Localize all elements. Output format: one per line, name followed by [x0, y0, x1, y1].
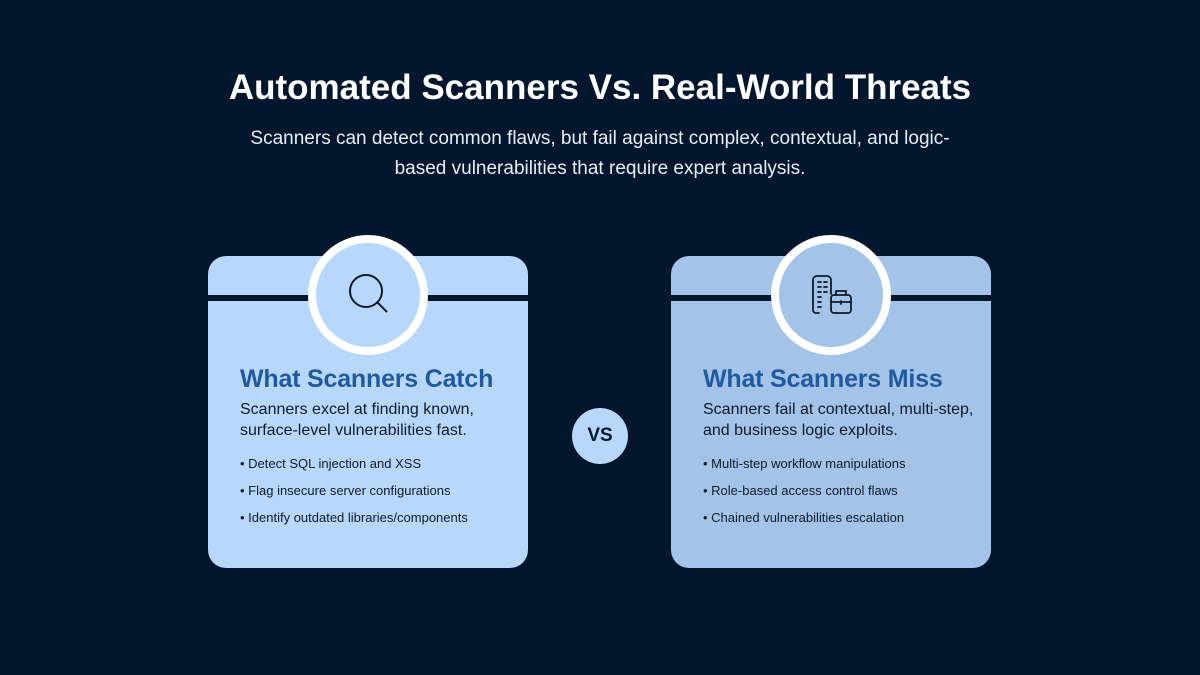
bullet list [703, 456, 906, 525]
vs badge: VS [587, 425, 613, 446]
bullet list: • Chained vulnerabilities escalation [703, 510, 904, 525]
bullet list: • Identify outdated libraries/components [240, 510, 468, 525]
bullet list: • Detect SQL injection and XSS [240, 456, 421, 471]
description: Scanners excel at finding known, surface-level vulnerabilities fast. [240, 401, 474, 439]
panel: catch [208, 256, 528, 568]
icon: magnifier [308, 235, 428, 355]
bullet list: • Flag insecure server configurations [240, 483, 450, 498]
heading: What Scanners Catch [240, 365, 493, 393]
icon: document briefcase [771, 235, 891, 355]
bullet list: • Role-based access control flaws [703, 483, 898, 498]
bullet list: • Multi-step workflow manipulations [703, 456, 906, 471]
panel: miss [671, 256, 991, 568]
bullet list [240, 456, 468, 525]
title: Automated Scanners Vs. Real-World Threats [229, 68, 971, 107]
subtitle [250, 128, 950, 179]
heading: What Scanners Miss [703, 365, 943, 393]
description: Scanners fail at contextual, multi-step, and business logic exploits. [703, 401, 973, 439]
vs badge [572, 408, 628, 464]
subtitle: based vulnerabilities that require expert analysis. [395, 158, 805, 179]
subtitle: Scanners can detect common flaws, but fail against complex, contextual, and logic- [250, 128, 950, 149]
